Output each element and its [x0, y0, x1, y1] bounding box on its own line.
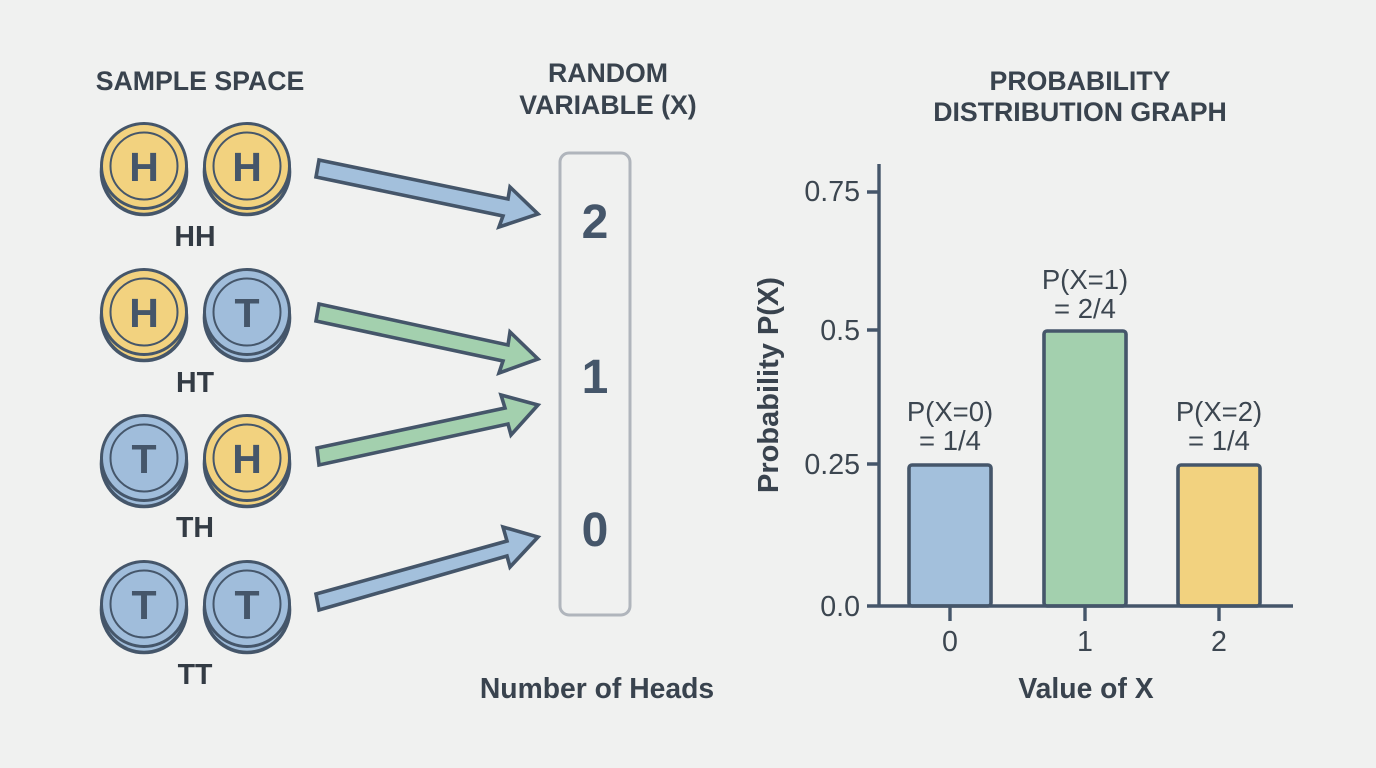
y axis: 0.0 — [820, 591, 860, 623]
x tick labels — [942, 626, 1227, 658]
outcome HH: H — [232, 144, 262, 190]
outcome HT: HT — [176, 367, 215, 399]
bar: X=0 — [909, 465, 991, 606]
outcome HT: T — [234, 290, 260, 336]
outcome TT: T — [234, 582, 260, 628]
y axis: 0.75 — [804, 176, 860, 208]
caption: number of heads: Number of Heads — [480, 672, 714, 704]
value 0: 0 — [582, 504, 608, 557]
value 2: 2 — [582, 196, 608, 249]
label: P(X=2): P(X=2) — [1176, 396, 1262, 427]
label: P(X=0): P(X=0) — [907, 396, 993, 427]
outcome TT — [102, 562, 290, 691]
x axis — [867, 606, 1293, 621]
y axis: 0.5 — [820, 315, 860, 347]
label: P(X=2): = 1/4 — [1188, 425, 1250, 456]
outcome TH: TH — [176, 512, 214, 544]
x tick labels: 1 — [1077, 626, 1093, 658]
outcome HH: H — [129, 144, 159, 190]
label: P(X=1): = 2/4 — [1054, 293, 1116, 324]
outcome HH: HH — [174, 221, 216, 253]
y axis title: Probability P(X) — [753, 277, 785, 493]
outcome TH — [102, 416, 290, 544]
outcome HT: H — [129, 290, 159, 336]
outcome TT: T — [131, 582, 157, 628]
y axis — [804, 164, 879, 623]
caption: value of x: Value of X — [1018, 672, 1154, 704]
arrow: TH to 1 — [317, 395, 538, 465]
label: P(X=0): = 1/4 — [919, 425, 981, 456]
bar: X=2 — [1178, 465, 1260, 606]
heading: random variable: RANDOM — [548, 58, 668, 88]
bar: X=1 — [1044, 331, 1126, 606]
arrow: HT to 1 — [316, 304, 538, 373]
outcome TH: T — [131, 436, 157, 482]
outcome HH — [102, 124, 290, 253]
heading: probability distribution graph: DISTRIBUTION GRAPH — [933, 97, 1227, 127]
value 1: 1 — [582, 351, 608, 404]
heading: random variable: VARIABLE (X) — [519, 90, 697, 120]
outcome TH: H — [232, 436, 262, 482]
x tick labels: 0 — [942, 626, 958, 658]
outcome HT — [102, 270, 290, 399]
arrow: TT to 0 — [316, 527, 538, 610]
x tick labels: 2 — [1211, 626, 1227, 658]
heading: sample space: SAMPLE SPACE — [96, 66, 304, 96]
random variable box — [560, 153, 630, 615]
outcome TT: TT — [178, 659, 213, 691]
label: P(X=1): P(X=1) — [1042, 264, 1128, 295]
arrow: HH to 2 — [316, 160, 538, 227]
heading: probability distribution graph: PROBABILITY — [990, 66, 1171, 96]
y axis: 0.25 — [804, 449, 860, 481]
